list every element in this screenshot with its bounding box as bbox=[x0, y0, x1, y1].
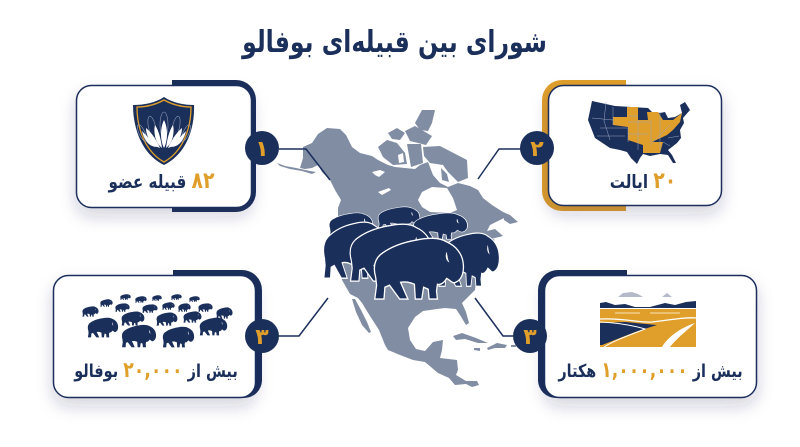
card 4: land bbox=[513, 270, 756, 398]
bison herd over map bbox=[324, 207, 499, 299]
map of North America bbox=[277, 110, 518, 387]
badge 4 bbox=[513, 319, 547, 353]
stat: 20 states: ۲۰ ایالت bbox=[610, 166, 676, 193]
stat: over 20,000 bison: بیش از ۲۰,۰۰۰ بوفالو bbox=[73, 357, 238, 383]
Hudson Bay bbox=[418, 187, 457, 213]
Aleutian islands bbox=[277, 163, 316, 174]
icon: bison herd bbox=[82, 294, 233, 347]
badge 3 bbox=[245, 319, 279, 353]
badge 2: ۲ bbox=[530, 137, 544, 162]
icon: landscape bbox=[600, 292, 696, 347]
badge 1 bbox=[245, 131, 279, 165]
card 3: bison count bbox=[54, 270, 279, 398]
badge 3: ۳ bbox=[255, 325, 269, 350]
stat: 82 tribes: ۸۲ قبیله عضو bbox=[108, 166, 215, 193]
card 1: tribes bbox=[76, 80, 279, 212]
stat: over 1,000,000 hectares: بیش از ۱,۰۰۰,۰۰۰ هکتار bbox=[557, 357, 743, 383]
badge 4: ۳ bbox=[523, 325, 537, 350]
connector lines bbox=[279, 149, 521, 336]
lakes bbox=[372, 170, 385, 177]
icon: feather shield bbox=[133, 97, 194, 165]
card 2: states bbox=[520, 80, 722, 211]
badge 1: ۱ bbox=[255, 137, 269, 162]
icon: US map bbox=[588, 101, 690, 164]
badge 2 bbox=[520, 131, 554, 165]
title: شورای بین قبیله‌ای بوفالو bbox=[240, 25, 547, 60]
